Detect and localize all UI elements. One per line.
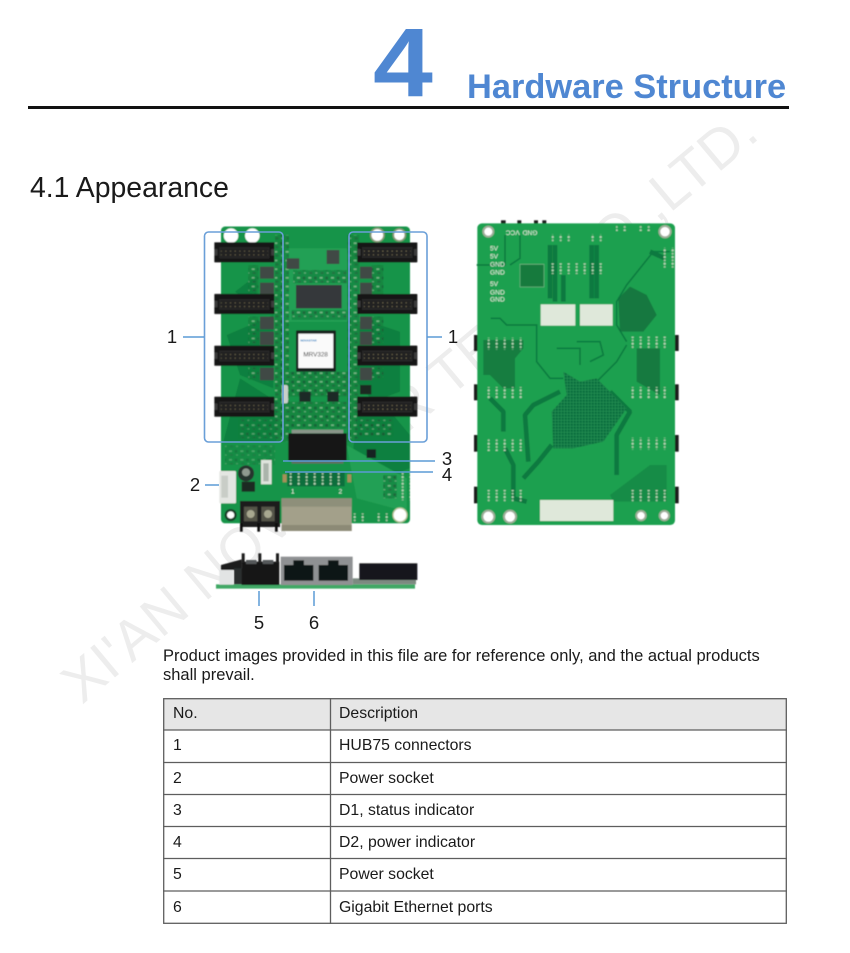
silk labels: 5V	[490, 254, 499, 261]
mounting holes	[482, 226, 671, 523]
callout frames for connectors	[204, 232, 427, 442]
board diagrams	[167, 220, 680, 633]
header row: No.	[173, 705, 198, 722]
callout numbers: 1	[448, 326, 458, 347]
header row: Description	[339, 705, 418, 722]
silk labels: GND	[522, 228, 537, 235]
table grid	[163, 698, 787, 924]
row 4	[173, 834, 475, 851]
callout numbers: 3	[442, 448, 452, 469]
row 2	[173, 770, 434, 786]
pad header	[283, 472, 351, 496]
rear view of board	[474, 220, 679, 525]
note text: shall prevail.	[163, 666, 255, 684]
bottom right pads	[353, 472, 410, 522]
silk labels: GND	[490, 261, 505, 268]
row 1	[173, 737, 472, 754]
row 5	[173, 866, 434, 883]
row 3: D1, status indicator	[339, 802, 474, 819]
callout numbers: 1	[167, 326, 177, 347]
chapter title: Hardware Structure	[467, 68, 786, 106]
edge tabs	[474, 220, 679, 503]
terminal block top view	[240, 501, 280, 532]
through-hole pads	[483, 225, 674, 502]
pad header: 1	[291, 489, 295, 496]
silk labels: 5V	[490, 281, 499, 288]
memory chip	[296, 285, 342, 308]
row 6: 6	[173, 898, 182, 916]
pad header: 2	[338, 489, 342, 496]
row 4: 4	[173, 834, 182, 851]
crystal	[282, 385, 288, 403]
small components	[225, 235, 397, 498]
note text: Product images provided in this file are for reference only, and the actual products	[163, 647, 760, 665]
front view of board	[214, 227, 417, 532]
row 6	[173, 898, 493, 916]
row 2: 2	[173, 770, 182, 786]
silk labels: VCC	[505, 228, 520, 235]
main chip with label	[296, 330, 336, 372]
board body	[477, 223, 675, 525]
callout numbers: 5	[254, 612, 264, 633]
callout numbers: 2	[190, 474, 200, 495]
capacitor	[238, 465, 255, 492]
main chip with label: NOVASTAR	[300, 339, 317, 343]
label block	[520, 264, 544, 287]
silk labels: 5V	[490, 245, 499, 252]
main chip with label: MRV328	[303, 351, 328, 358]
central processor fan-out	[552, 372, 627, 448]
callout lines	[183, 337, 442, 606]
white pads	[540, 304, 613, 521]
power socket top view	[219, 460, 272, 503]
silk labels: GND	[490, 269, 505, 276]
large chip	[288, 430, 347, 464]
row 1: 1	[173, 737, 182, 754]
note text	[163, 647, 760, 684]
silk labels: GND	[490, 297, 505, 304]
row 3	[173, 802, 474, 819]
row 5: 5	[173, 866, 182, 883]
row 1: HUB75 connectors	[339, 737, 472, 754]
header row	[163, 698, 787, 730]
HUB75 connectors right	[357, 242, 417, 417]
copper traces	[477, 235, 670, 382]
mounting holes	[224, 228, 407, 522]
row 6: Gigabit Ethernet ports	[339, 898, 493, 916]
callout numbers	[167, 326, 458, 633]
silk labels: GND	[490, 289, 505, 296]
callout numbers: 4	[442, 464, 452, 485]
driver chips	[260, 250, 376, 458]
watermark: XI'AN NOVASTAR TECH CO.,LTD.	[49, 98, 769, 714]
side view of board	[216, 553, 417, 589]
row 4: D2, power indicator	[339, 834, 475, 851]
chapter number: 4	[373, 8, 433, 117]
heading rule	[28, 106, 789, 109]
row 3: 3	[173, 802, 182, 819]
HUB75 connectors left	[214, 242, 274, 417]
section heading: 4.1 Appearance	[30, 172, 229, 204]
callout numbers: 6	[309, 612, 319, 633]
row 5: Power socket	[339, 866, 434, 883]
spec table	[163, 698, 787, 924]
silk labels	[490, 228, 537, 304]
board body	[221, 227, 410, 523]
row 2: Power socket	[339, 770, 434, 786]
Ethernet ports top view	[282, 498, 352, 531]
